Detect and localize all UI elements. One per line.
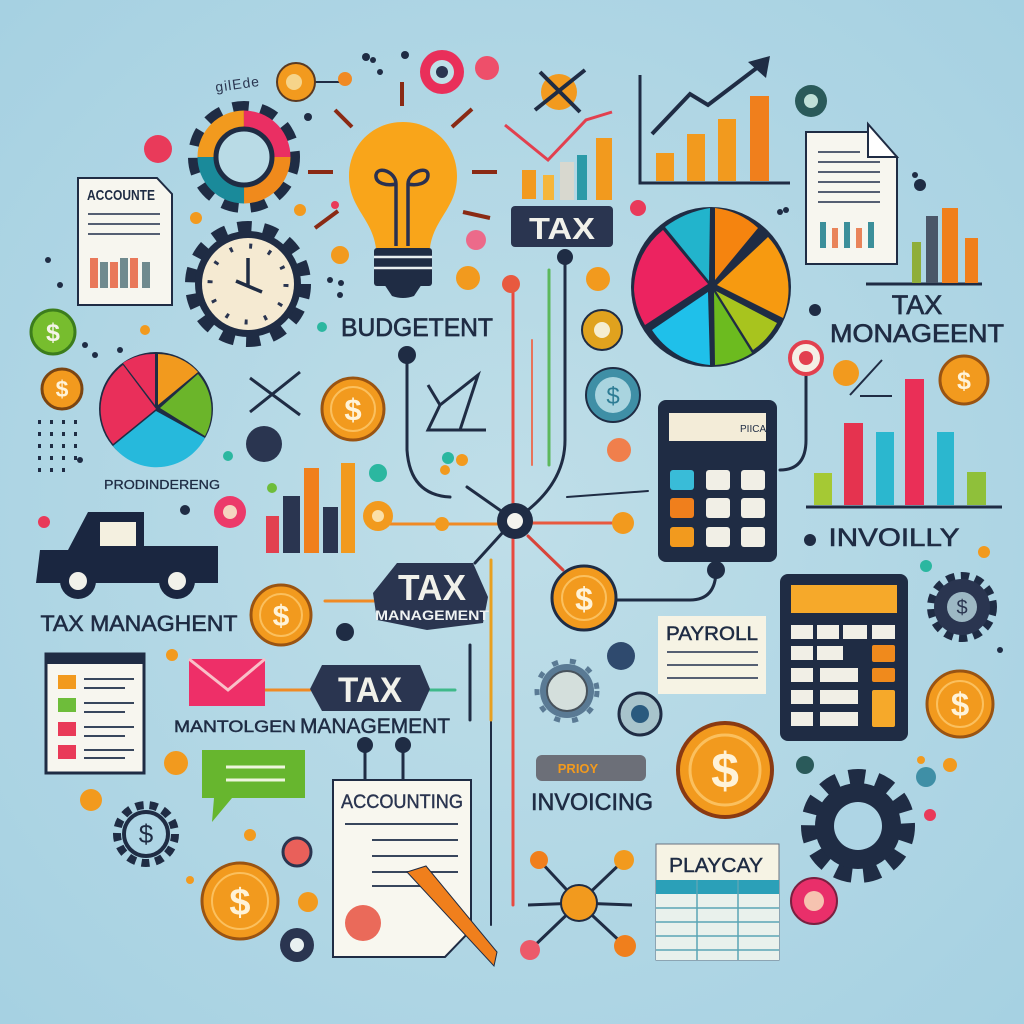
label: TAX Management center: TAX bbox=[398, 567, 466, 608]
icon: dollar gear right: $ bbox=[956, 597, 968, 619]
icon: pink ring node bbox=[790, 342, 822, 374]
calculator: center right bbox=[658, 400, 777, 562]
icon: pink ring bottom right bbox=[791, 878, 837, 924]
coin: center left bbox=[322, 378, 384, 440]
connector node bbox=[435, 517, 449, 531]
coin: center right: $ bbox=[575, 581, 593, 617]
label: TAX top bbox=[511, 206, 613, 247]
icon: network star bbox=[520, 850, 636, 960]
label: TAX MONAGEENT bbox=[830, 290, 1004, 348]
calculator: center right: PIICA bbox=[740, 424, 766, 435]
document: PAYROLL: PAYROLL bbox=[666, 624, 758, 645]
document: ACCOUNTING with pencil: ACCOUNTING bbox=[341, 792, 463, 813]
icon: big gear bbox=[812, 780, 904, 872]
decorative scribble caption: gilEde bbox=[214, 73, 261, 95]
label: TAX MONAGEENT: MONAGEENT bbox=[830, 320, 1004, 348]
icon: pink envelope bbox=[189, 659, 265, 706]
document: accounting report left bbox=[78, 178, 172, 305]
icon: pink ring left bbox=[214, 496, 246, 528]
icon: top rings bbox=[80, 50, 936, 962]
coin: large invoicing: $ bbox=[711, 743, 739, 799]
label: TAX Management center: MANAGEMENT bbox=[375, 607, 489, 623]
icon: orange ring node bbox=[363, 501, 393, 531]
label: INVOICING: INVOICING bbox=[531, 789, 653, 816]
icon: mini trend bbox=[833, 360, 892, 396]
coin: far right: $ bbox=[951, 686, 969, 723]
document: PAYROLL bbox=[658, 616, 766, 694]
chart: bars right of report bbox=[866, 208, 982, 284]
label: INVOILLY: INVOILLY bbox=[828, 524, 960, 552]
coin: left second: $ bbox=[56, 376, 69, 402]
connector network bbox=[265, 82, 806, 925]
icon: dollar gear bottom-left bbox=[117, 805, 175, 863]
document: top right report bbox=[806, 124, 897, 264]
label: TAX top: TAX bbox=[529, 211, 595, 246]
icon: blue coin bbox=[586, 368, 640, 422]
coin: truck right bbox=[251, 585, 311, 645]
label: TAX tag: TAX bbox=[338, 671, 403, 710]
coin: large invoicing bbox=[678, 723, 772, 817]
coin: left small: $ bbox=[46, 319, 60, 347]
central hub node bbox=[497, 503, 533, 539]
label: TAX MANAGHENT: TAX MANAGHENT bbox=[40, 611, 238, 636]
label: small caption: PRODINDERENG bbox=[104, 477, 220, 492]
coin: bottom-left: $ bbox=[229, 882, 251, 924]
label: MANTOLGEN MANAGEMENT: MANTOLGEN bbox=[174, 717, 296, 736]
document: accounting report left: ACCOUNTE bbox=[87, 187, 155, 204]
icon: olive ring bbox=[582, 310, 622, 350]
icon: crossed tools bbox=[535, 70, 585, 112]
icon: sketch envelope bbox=[428, 375, 486, 430]
label: MANTOLGEN MANAGEMENT: MANAGEMENT bbox=[300, 715, 450, 738]
icon: blue coin: $ bbox=[606, 383, 620, 410]
list: checklist card bbox=[46, 654, 144, 773]
label: TAX tag bbox=[310, 665, 430, 711]
pie chart: large bbox=[631, 207, 791, 367]
chart: dots matrix left bbox=[38, 420, 77, 472]
icon: gear ring bbox=[619, 693, 661, 735]
icon: dark small gear bbox=[607, 642, 635, 670]
icon: gear clock bbox=[191, 227, 305, 341]
icon: pickup truck bbox=[36, 512, 218, 599]
coin: far right bbox=[927, 671, 993, 737]
label: TAX Management center bbox=[373, 563, 489, 630]
coin: bottom-left bbox=[202, 863, 278, 939]
calculator: right bbox=[780, 574, 908, 741]
icon: dollar gear bottom-left: $ bbox=[139, 819, 154, 849]
icon: crossed lines bbox=[250, 372, 300, 415]
chart: colourful bars bbox=[806, 379, 1002, 507]
coin: truck right: $ bbox=[273, 600, 290, 633]
chart: center left bars bbox=[266, 463, 355, 553]
label: small Payroll tag: PRIOY bbox=[558, 761, 599, 776]
chart: growth bars top right bbox=[640, 56, 790, 183]
pie chart: left bbox=[99, 352, 213, 467]
coin: right: $ bbox=[957, 367, 971, 395]
table: PLAYCAY bbox=[656, 844, 779, 960]
icon: dark sphere bbox=[246, 426, 282, 462]
icon: lightbulb bbox=[308, 82, 497, 298]
table: PLAYCAY: PLAYCAY bbox=[669, 855, 763, 877]
label: MANTOLGEN MANAGEMENT bbox=[174, 715, 450, 738]
coin: right bbox=[940, 356, 988, 404]
document: ACCOUNTING with pencil bbox=[333, 780, 497, 966]
label: TAX MONAGEENT: TAX bbox=[892, 290, 942, 320]
coin: center right bbox=[552, 566, 616, 630]
icon: speech bubble bbox=[202, 750, 305, 822]
label: small Payroll tag bbox=[536, 755, 646, 781]
coin: center left: $ bbox=[344, 392, 362, 427]
label: BUDGETENT: BUDGETENT bbox=[341, 314, 493, 342]
icon: dollar gear right bbox=[932, 577, 992, 637]
coin: left small bbox=[31, 310, 75, 354]
coin: left second bbox=[42, 369, 82, 409]
decorative confetti bbox=[38, 51, 1003, 884]
chart: small orange bars with red trend bbox=[505, 112, 612, 200]
icon: gear with donut chart bbox=[194, 107, 294, 207]
icon: sun gear bbox=[537, 661, 597, 721]
